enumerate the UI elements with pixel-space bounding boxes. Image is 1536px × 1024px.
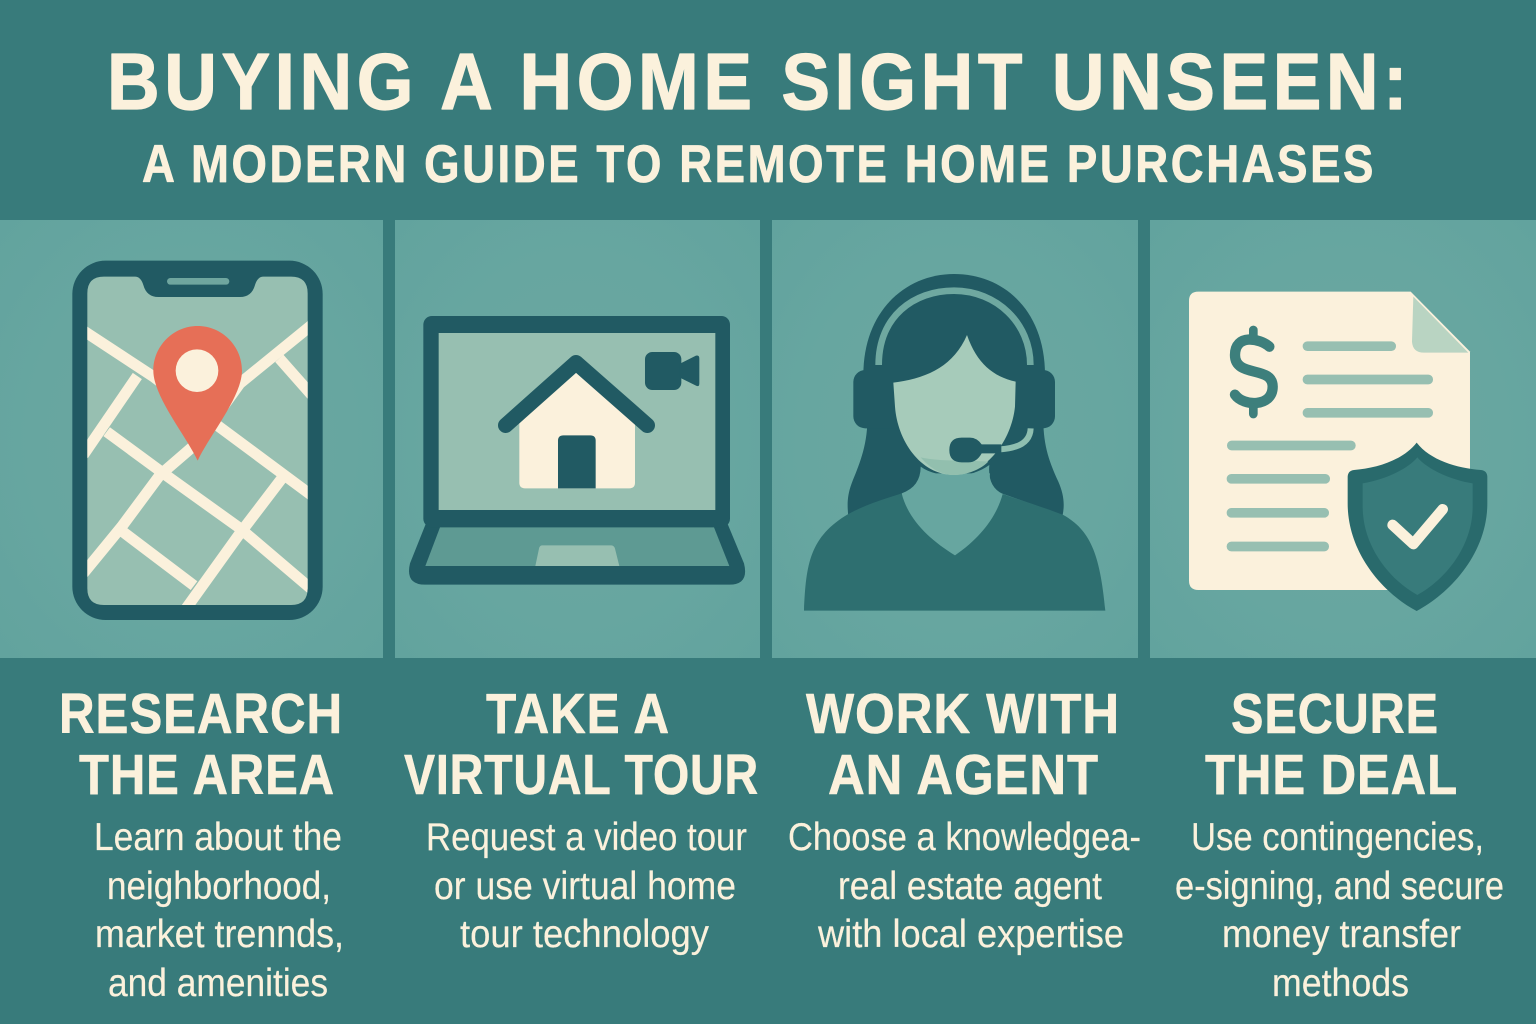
description: work with an agent: with local expertise [817, 913, 1124, 956]
face [893, 335, 1016, 475]
description: secure the deal [1175, 816, 1504, 1005]
icon: house [506, 363, 647, 488]
heading: secure the deal [1205, 682, 1458, 807]
description: secure the deal: Use contingencies, [1191, 816, 1484, 859]
heading: work with an agent: AN AGENT [828, 743, 1099, 807]
description: secure the deal: methods [1272, 962, 1409, 1005]
description: research the area: neighborhood, [107, 865, 331, 908]
icon: shield with check [1348, 443, 1487, 611]
heading: work with an agent [806, 682, 1120, 807]
icon: phone with map [72, 261, 323, 620]
heading: take a virtual tour: VIRTUAL TOUR [404, 743, 759, 807]
heading: take a virtual tour [404, 682, 759, 807]
icon: dollar sign [1235, 330, 1273, 414]
description: secure the deal: money transfer [1222, 913, 1461, 956]
icon: location pin [153, 326, 242, 461]
title block [107, 37, 1412, 194]
microphone [949, 428, 1031, 462]
heading: secure the deal: THE DEAL [1205, 743, 1458, 807]
column: research the area [59, 682, 344, 1005]
subtitle: A MODERN GUIDE TO REMOTE HOME PURCHASES [142, 135, 1376, 194]
icon: agent with headset [804, 274, 1105, 611]
icon: video camera [645, 352, 699, 390]
heading: research the area: THE AREA [79, 743, 335, 807]
text lines [1227, 341, 1433, 551]
description: work with an agent: Choose a knowledgea- [788, 816, 1141, 859]
heading: secure the deal: SECURE [1231, 682, 1439, 746]
neck [902, 465, 1003, 560]
heading: take a virtual tour: TAKE A [486, 682, 670, 746]
column: take a virtual tour [404, 682, 759, 956]
description: research the area: and amenities [108, 962, 328, 1005]
description: research the area [94, 816, 344, 1005]
heading: research the area [59, 682, 343, 807]
icon: laptop with house [409, 316, 745, 585]
description: work with an agent: real estate agent [838, 865, 1102, 908]
column: secure the deal [1175, 682, 1504, 1005]
description: take a virtual tour: Request a video tour [426, 816, 747, 859]
main title: BUYING A HOME SIGHT UNSEEN: [107, 37, 1412, 126]
heading: work with an agent: WORK WITH [806, 682, 1120, 746]
description: research the area: market trennds, [95, 913, 344, 956]
panel: research the area illustration [0, 220, 383, 658]
description: research the area: Learn about the [94, 816, 342, 859]
panel: secure the deal illustration [1150, 220, 1536, 658]
description: take a virtual tour [426, 816, 747, 956]
description: take a virtual tour: or use virtual home [434, 865, 736, 908]
panel: virtual tour illustration [395, 220, 760, 658]
description: take a virtual tour: tour technology [460, 913, 709, 956]
icon: contract document [1189, 292, 1487, 611]
shirt [804, 493, 1105, 611]
panel: agent illustration [772, 220, 1138, 658]
column: work with an agent [788, 682, 1141, 956]
description: work with an agent [788, 816, 1141, 956]
heading: research the area: RESEARCH [59, 682, 343, 746]
